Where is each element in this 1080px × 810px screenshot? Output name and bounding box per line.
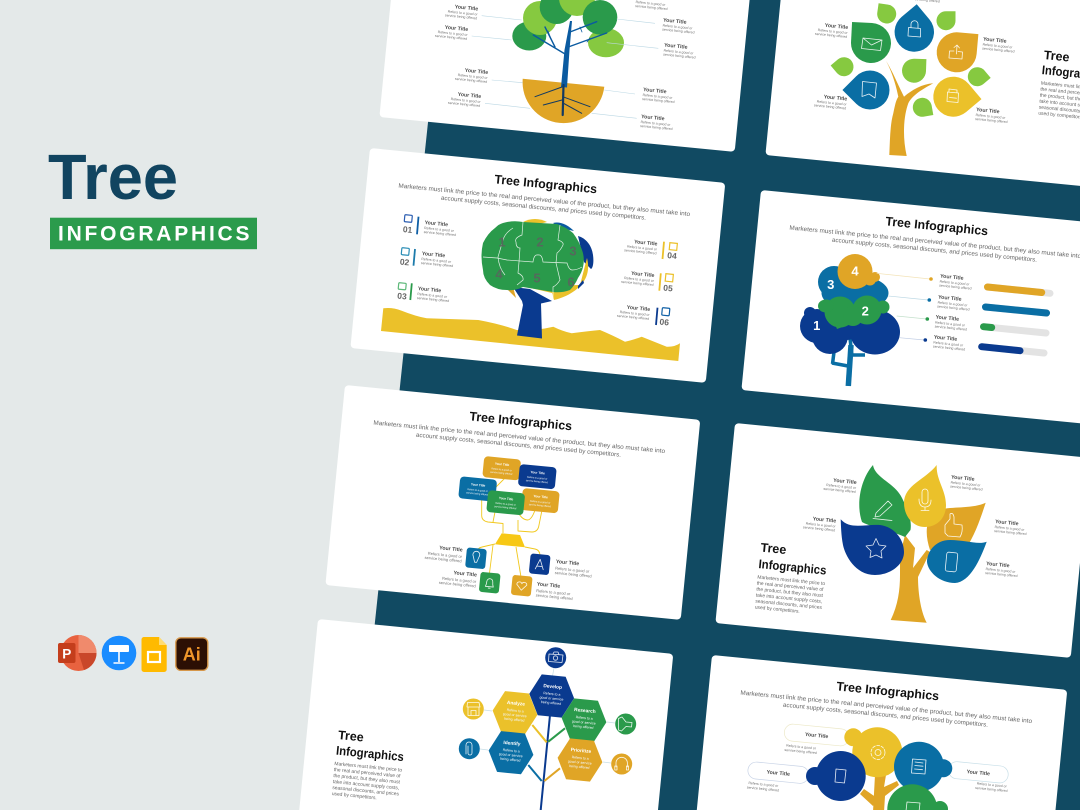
list item 01: Your Title [424,220,448,228]
list item 06: Refers to a good or [620,310,651,317]
label: leaf titles: service being offered [994,529,1027,536]
numbers 1 to 6: 3 [569,244,577,258]
label: right titles: Refers to a good or [635,0,666,7]
text block: side title and paragraph: the real and perceived value of [757,581,824,593]
flow box: gold top: service being offered [490,471,513,476]
flow box: gold top: Your Title [495,462,510,467]
list item 03: service being offered [417,296,449,303]
hexagon: Prioritize [556,737,604,783]
chart: trunk and branches [533,21,607,88]
flow box: blue: Refers to a good or [467,488,488,493]
heading and intro: account supply costs, seasonal discounts, and prices used by competitors. [416,432,622,459]
hexagon: Analyze: Refers to a [506,708,524,714]
list item 02: 02 [399,257,410,267]
label: left titles: Your Title [464,68,488,76]
label: left titles: service being offered [445,13,477,20]
flow box: green: Your Title [499,496,514,501]
connector lines [472,16,658,118]
list item 04: 04 [667,250,677,261]
icon: PowerPoint: P [62,646,71,662]
text block: side title and paragraph: Infographics [758,557,827,578]
label: flow titles: service being offered [536,592,573,601]
icon: shop circle [463,698,484,720]
panel: tree with drop leaves [765,0,1080,190]
label: leaf titles: Refers to a good or [975,113,1006,120]
leaf: yellow microphone [904,465,946,527]
text block: side title and paragraph: used by competitors. [332,791,377,801]
text block: side title and paragraph: Infographics [335,744,404,764]
crown: green image [887,784,948,810]
label: leaf titles: Refers to a good or [806,522,837,529]
label: right titles: service being offered [663,52,696,60]
icons: leaf glyphs [866,489,962,572]
chart: crown 2 [818,296,890,329]
text block: side title and paragraph: Marketers must link the price to [334,761,403,774]
list item 03: Refers to a good or [417,292,448,299]
label: flow titles: Refers to a good or [555,565,590,574]
label: right titles: Refers to a good or [640,120,671,127]
flow box: gold right: Your Title [533,494,548,499]
label: leaf titles [814,0,1016,124]
leaf: green pencil [859,465,911,537]
flow box: navy: Refers to a good or [527,476,548,481]
flow box: navy: Your Title [530,470,545,475]
leaf: gold thumb [927,503,986,550]
connector lines [476,478,542,577]
list item 05: 05 [663,283,673,293]
crown numbers: 4 [851,264,859,278]
hexagon: Research: Research [574,707,596,715]
label: leaf titles: Refers to a good or [826,483,857,490]
icon: letter square [529,553,551,575]
hexagon: Prioritize: being offered [569,764,590,770]
hexagon: Identify [487,730,535,775]
flow box: navy: service being offered [526,479,549,484]
list item 06: Your Title [626,305,650,313]
pill labels: Your Title [766,770,790,778]
label: bar titles: Refers to a good or [935,320,966,327]
label: leaf titles: service being offered [814,103,846,110]
crown: yellow gear [844,727,902,777]
heading and intro: account supply costs, seasonal discounts, and prices used by competitors. [441,195,647,222]
flow box: gold top: Refers to a good or [491,467,512,472]
label: right titles: Refers to a good or [663,48,694,55]
brand subtitle badge: INFOGRAPHICS [50,218,257,249]
panel: flow tree [325,385,700,620]
label: flow titles: service being offered [424,555,462,563]
label: leaf titles: Refers to a good or [817,100,848,107]
panel: puzzle brain tree [350,148,725,383]
label: left titles: service being offered [448,101,480,108]
pill labels [747,723,1009,793]
label: flow titles: service being offered [439,580,476,588]
text block: side title and paragraph [1038,48,1080,121]
numbers 1 to 6: 1 [498,234,506,250]
hexagon: Identify: good or service [499,752,523,758]
list item 04: Refers to a good or [627,245,658,252]
label: leaf titles: Refers to a good or [818,28,849,35]
flow box: gold top [482,456,521,481]
hexagon: Research [560,697,608,743]
chart: tree canopy [512,0,624,57]
flow trapezoid [495,533,525,547]
heading and intro: Marketers must link the price to the real and perceived value of the product, but they also must take into [789,224,1080,260]
chart: crown 1 [800,307,900,354]
label: leaf titles: Your Title [951,475,975,483]
hexagon: Develop: being offered [541,700,561,706]
label: leaf titles: Refers to a good or [950,480,981,487]
label: right titles: service being offered [642,97,675,104]
label: leaf titles: Your Title [983,37,1007,45]
label: left titles: service being offered [455,77,487,84]
icon: Adobe Illustrator [176,638,208,670]
list item 03 [397,283,450,303]
label: right titles: Your Title [641,114,665,122]
list item 06: service being offered [617,314,649,321]
chart: stem and branches [480,668,615,810]
hexagon: Research: good or service [572,719,596,726]
flow box: gold right: service being offered [529,503,552,508]
flow box: blue: service being offered [466,491,489,497]
label: leaf titles: Your Title [995,519,1019,527]
icon: bell square [479,572,501,594]
icon: camera circle [545,647,566,668]
pill labels: Your Title [966,769,990,777]
label: bar titles [933,274,973,352]
list item 02: Refers to a good or [421,257,452,264]
label: leaf titles: Your Title [812,516,836,525]
chart: progress bars [982,287,1050,353]
icon: headphones circle [611,754,632,774]
label: flow titles: Refers to a good or [442,576,477,584]
heading and intro: Tree Infographics [494,172,598,196]
leaf: navy star [841,519,904,575]
leaf: blue phone [927,540,987,583]
label: flow titles: Your Title [439,545,463,554]
label: right titles [635,0,697,131]
pill labels: service being offered [975,786,1008,793]
pill labels: Your Title [805,732,829,740]
label: leaf titles: service being offered [985,571,1018,578]
hexagon: Analyze: being offered [504,717,525,723]
label: left titles: Refers to a good or [458,73,489,80]
connector lines and dots [877,273,933,342]
flow box: gold right: Refers to a good or [530,500,551,505]
pill labels: Refers to a good or [786,744,817,751]
icon: heart square [511,575,533,597]
label: leaf titles: service being offered [975,117,1008,124]
text block: side title and paragraph: Tree [760,541,787,557]
label: flow titles: Refers to a good or [536,588,571,596]
label: right titles: service being offered [640,124,673,131]
label: leaf titles: service being offered [823,487,856,494]
flow box: blue [458,476,497,502]
label: bar titles: service being offered [937,304,970,312]
chart: roots [535,85,590,115]
flow box: blue: Your Title [471,482,486,488]
heading and intro: Tree Infographics [885,214,989,238]
heading and intro [397,163,693,226]
hexagon: Prioritize: Prioritize [570,747,592,755]
list item 03: Your Title [418,286,442,294]
heading and intro: account supply costs, seasonal discounts, and prices used by competitors. [832,237,1038,264]
label: bar titles: service being offered [939,283,972,291]
icon: share leaf [935,31,978,74]
heading and intro [788,205,1080,268]
chart: trunk [860,775,899,810]
label: bar titles: service being offered [935,324,967,332]
label: flow titles: Your Title [453,570,477,579]
heading and intro: account supply costs, seasonal discounts, and prices used by competitors. [783,702,989,729]
label: right titles: service being offered [635,4,668,11]
hexagon: Develop: Develop [543,683,562,691]
label: left titles: Your Title [454,4,478,13]
flow box: green: service being offered [494,505,517,510]
list item 06: 06 [659,317,670,327]
label: flow titles [424,544,593,601]
heading and intro: Marketers must link the price to the real and perceived value of the product, but they also must take into [373,419,666,455]
brand title: Tree: Tree [48,141,178,213]
panel: big leaf tree [715,423,1080,658]
chart: trunk [891,535,930,623]
hexagon: Identify: Refers to a [502,748,520,754]
list item 04: Your Title [634,239,658,248]
text block: side title and paragraph [332,728,404,801]
list item 01 [402,215,457,237]
crown: blue clipboard [894,742,952,792]
label: leaf titles: Your Title [824,23,848,31]
hexagon: Prioritize: good or service [568,759,592,766]
label: leaf titles [803,475,1028,578]
panel: cloud crown tree [692,655,1067,810]
icon: bookmark leaf [842,62,898,118]
panel: layered tree with progress bars [741,190,1080,425]
puzzle seams [483,222,582,300]
label: leaf titles: service being offered [803,525,835,532]
label: flow titles: service being offered [555,570,592,579]
icon: lock leaf [887,4,942,60]
crown numbers: 2 [862,304,869,318]
heading and intro [372,400,668,463]
hexagon: Develop [527,673,576,719]
chart: ground [381,308,680,361]
hexagon: Identify: being offered [500,757,521,763]
text block: side title and paragraph [755,541,827,615]
label: leaf titles: Your Title [833,478,857,486]
list item 02 [399,248,454,268]
hexagon: Analyze [491,690,539,735]
text block: side title and paragraph: seasonal discounts, and prices [332,785,400,798]
crown: navy documents [806,751,866,801]
hexagon: Develop: Refers to a [543,691,561,697]
label: left titles: service being offered [435,34,467,41]
heading and intro: Tree Infographics [469,409,573,433]
text block: side title and paragraph: take into account supply costs, [756,593,822,605]
label: bar titles: Your Title [938,295,962,303]
numbers 1 to 6: 2 [536,234,544,250]
label: flow titles: Your Title [556,559,580,567]
crown numbers: 3 [827,277,834,292]
label: bar titles: service being offered [933,344,965,352]
chart: trunk [513,287,552,338]
list item 05: Your Title [631,271,655,279]
list item 02: Your Title [422,251,446,259]
label: leaf titles: service being offered [950,484,983,492]
label: leaf titles: Your Title [986,561,1010,569]
label: left titles: Your Title [444,25,468,33]
label: left titles [435,3,489,108]
hexagon: Research: Refers to a [575,715,593,721]
numbers 1 to 6: 5 [533,270,541,286]
hexagon: Analyze: good or service [503,712,527,718]
label: bar titles: Your Title [935,315,959,323]
chart: crown 4 [838,254,880,289]
chart: puzzle crown [482,221,584,292]
text block: side title and paragraph: the real and perceived value of [334,767,401,780]
pill labels: Refers to a good or [977,782,1008,789]
label: left titles: Refers to a good or [438,30,469,37]
label: right titles: Your Title [664,43,688,51]
list item 06 [617,304,670,327]
chart: crown back shapes [507,219,593,300]
hexagon: Develop: good or service [539,695,564,702]
chart: trunk [832,338,865,386]
crown numbers [813,264,869,333]
icon: envelope leaf [850,22,892,64]
label: leaf titles: Refers to a good or [994,525,1025,532]
label: leaf titles: service being offered [815,32,847,39]
label: leaf titles: Your Title [976,107,1000,115]
list item 04: service being offered [624,248,657,255]
list item 05: Refers to a good or [624,276,655,283]
crown numbers: 1 [813,318,820,333]
pill labels: service being offered [784,748,817,755]
list item 04 [624,238,677,261]
list item 03: 03 [397,291,407,301]
label: right titles: Your Title [643,87,667,95]
hexagon: Identify: Identify [503,740,521,748]
pill labels: service being offered [747,785,779,793]
label: right titles: Refers to a good or [662,23,693,30]
heading and intro [739,670,1035,733]
icon: bulb square [465,547,487,569]
label: leaf titles: Refers to a good or [982,42,1013,49]
hexagon: Prioritize: Refers to a [571,755,589,761]
text block: side title and paragraph: used by competitors. [755,605,800,615]
heading and intro: Marketers must link the price to the real and perceived value of the product, but they also must take into [740,689,1033,725]
text block: side title and paragraph: Tree [337,728,364,744]
chart: crown 3 [818,266,888,310]
icon: printer leaf [925,69,981,125]
label: left titles: Your Title [457,92,481,100]
text block: side title and paragraph: seasonal discounts, and prices [755,599,823,611]
list item 02: service being offered [421,261,453,268]
label: flow titles: Refers to a good or [428,551,463,559]
label: right titles: service being offered [662,27,695,35]
label: leaf titles: Refers to a good or [985,567,1016,574]
icon: Adobe Illustrator: Ai [183,644,201,664]
panel: hexagon tree [298,619,673,810]
text block: side title and paragraph: the product, but they also must [756,587,824,599]
label: bar titles: Your Title [940,274,964,282]
list item 01: Refers to a good or [424,226,455,233]
hexagon: Analyze: Analyze [507,700,526,708]
brand subtitle badge: INFOGRAPHICS: INFOGRAPHICS [58,223,250,246]
numbers 1 to 6: 6 [567,274,575,290]
flow box: green: Refers to a good or [495,502,516,507]
hexagon: Research: being offered [573,724,594,730]
numbers 1 to 6 [495,234,577,290]
list item 01: 01 [402,224,413,235]
text block: side title and paragraph: the product, but they also must [333,773,401,786]
list item 05 [621,270,673,293]
list item 05: service being offered [621,280,654,287]
label: bar titles: Refers to a good or [937,300,968,307]
heading and intro: Tree Infographics [836,679,940,703]
chart: soil half circle [523,79,604,123]
label: right titles: Refers to a good or [642,93,673,100]
label: left titles: Refers to a good or [451,97,482,104]
icon: Keynote [102,636,136,670]
label: leaf titles: service being offered [982,46,1015,54]
icon: paperclip circle [459,738,480,759]
dark teal backdrop [355,0,1080,810]
list item 01: service being offered [424,230,456,237]
label: bar titles: Refers to a good or [939,279,970,286]
heading and intro: Marketers must link the price to the real and perceived value of the product, but they also must take into [398,182,691,218]
chart: small light leaves [831,3,991,118]
label: flow titles: Your Title [537,582,561,590]
icon: PowerPoint [58,635,96,671]
flow box: gold right [521,488,560,513]
numbers 1 to 6: 4 [495,266,503,282]
text block: side title and paragraph: take into account supply costs, [333,779,399,791]
label: bar titles: Refers to a good or [933,340,964,347]
flow box: green [486,490,525,515]
label: leaf titles: Your Title [823,94,847,103]
pill labels: Refers to a good or [748,781,779,788]
label: right titles: Your Title [663,18,687,26]
panel: tree with roots [379,0,754,152]
icon: Google Slides [142,637,167,672]
flow box: navy [518,464,557,489]
chart: trunk [886,61,933,156]
icon: megaphone circle [615,714,636,734]
text block: side title and paragraph: Marketers must link the price to [757,575,826,587]
label: bar titles: Your Title [934,335,958,343]
label: left titles: Refers to a good or [448,10,479,17]
text block: side title and paragraph: Tree [1043,48,1070,64]
